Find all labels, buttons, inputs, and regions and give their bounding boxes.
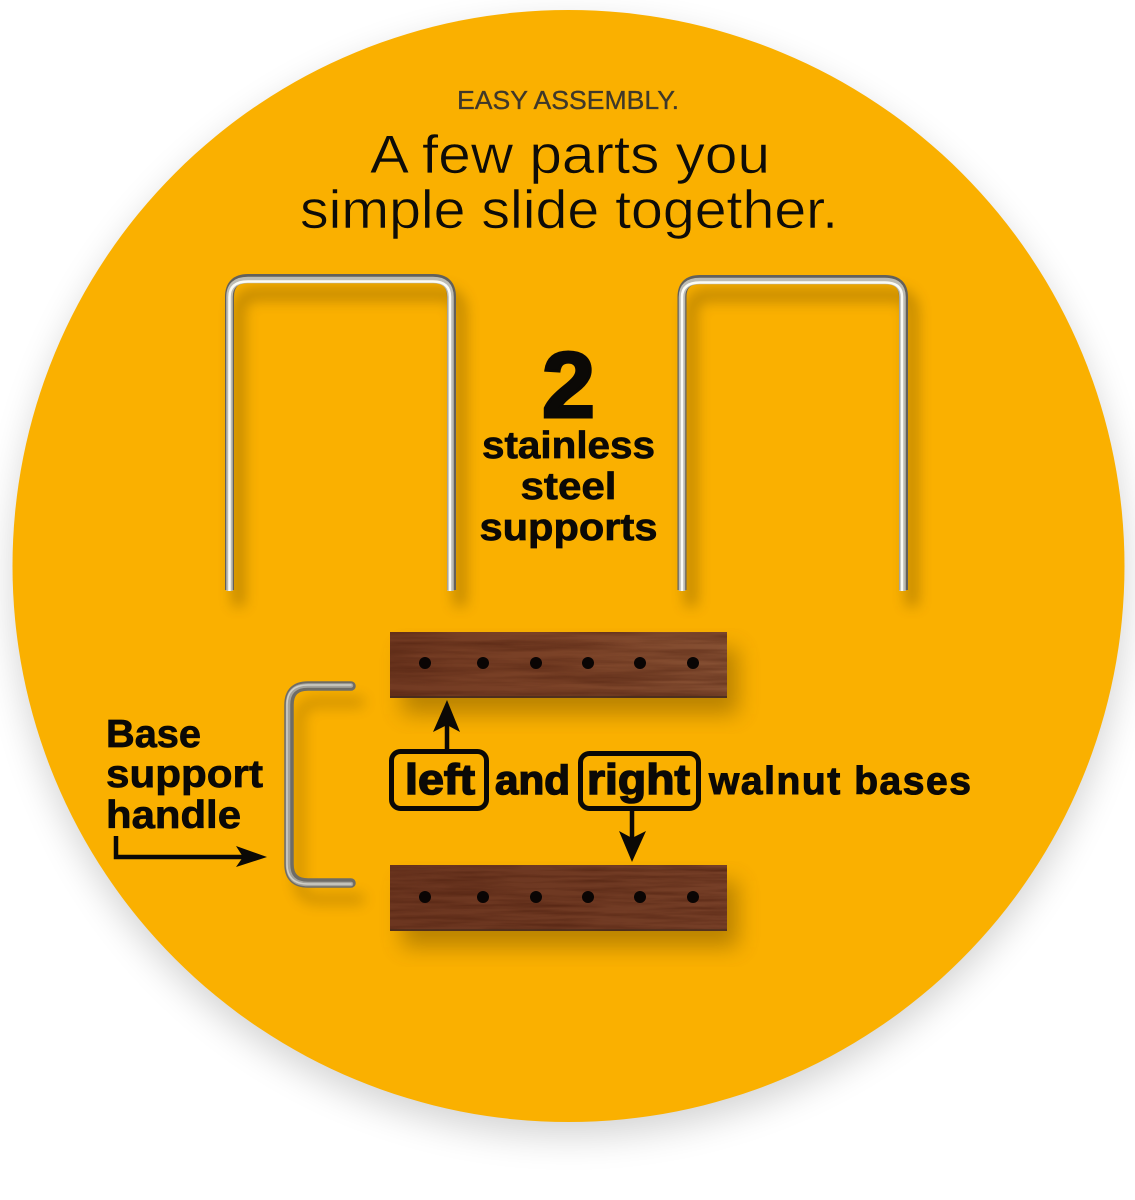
supports label: 2 (542, 333, 595, 437)
supports label: supports (480, 507, 658, 549)
supports label: steel (520, 466, 616, 508)
handle label: Base (106, 713, 201, 756)
left label box (392, 752, 486, 808)
title (300, 125, 838, 240)
bottom walnut base (390, 865, 738, 947)
left stainless steel support (230, 278, 460, 606)
supports label (480, 333, 658, 549)
walnut bases label: walnut bases (708, 760, 971, 803)
handle label: support (106, 753, 263, 796)
base support handle (287, 685, 360, 899)
eyebrow heading: EASY ASSEMBLY. (457, 87, 679, 115)
handle label (106, 713, 263, 837)
left label box: left (405, 756, 475, 804)
title: simple slide together. (300, 180, 838, 240)
and label: and (495, 757, 570, 803)
right stainless steel support (682, 280, 912, 606)
arrow: left to top base (433, 700, 460, 750)
right label box: right (587, 756, 690, 804)
arrow: right to bottom base (619, 810, 646, 862)
title: A few parts you (370, 125, 770, 185)
top walnut base (390, 632, 738, 714)
handle label: handle (106, 794, 241, 837)
arrow: handle label to handle (116, 836, 267, 867)
supports label: stainless (482, 425, 655, 467)
